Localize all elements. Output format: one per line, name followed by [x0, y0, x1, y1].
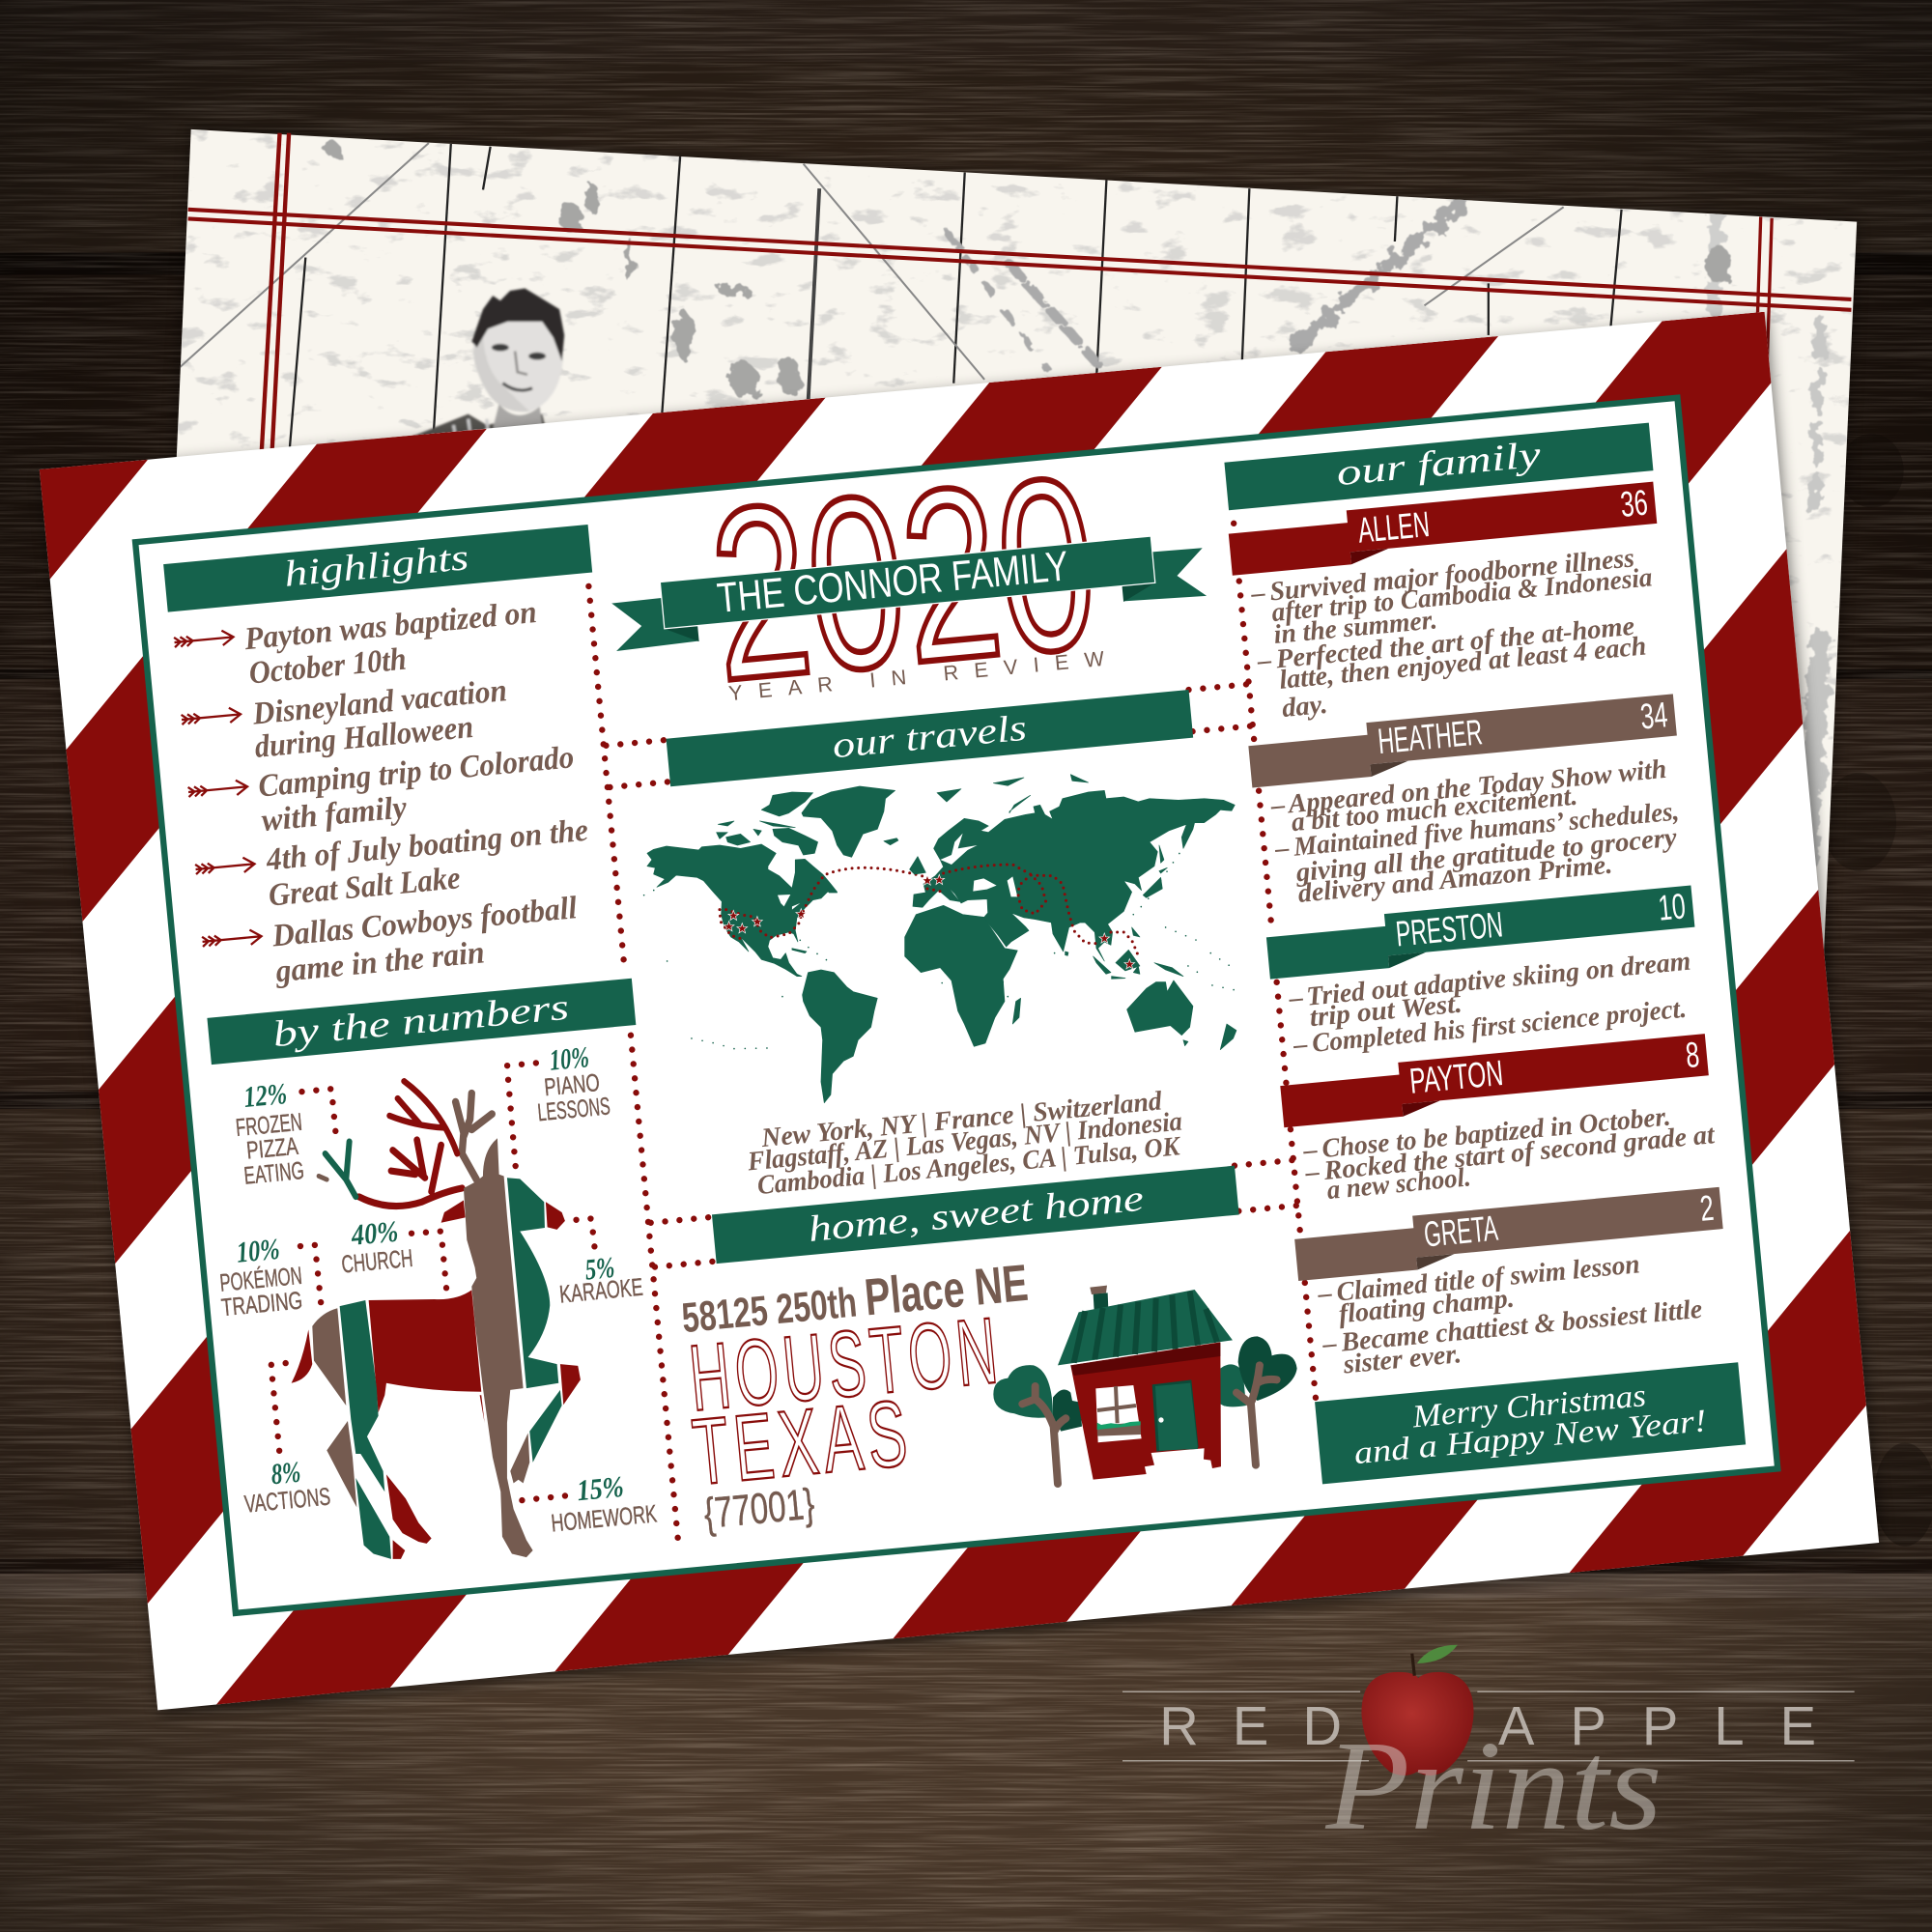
card content, rotated with the card: [132, 369, 1777, 1613]
plaid lines: [188, 133, 1851, 458]
Greta notes: –: [1316, 1278, 1333, 1309]
stat: vacations: 8%: [270, 1456, 302, 1491]
travel destinations list: [744, 1085, 1186, 1202]
Preston notes: –: [1292, 1029, 1309, 1061]
highlights list: Dallas Cowboys football: [270, 890, 579, 954]
member banner: Allen: 36: [1619, 483, 1649, 525]
ribbon: the Connor family: [609, 530, 1208, 652]
travel destinations list: New York, NY | France | Switzerland: [759, 1086, 1164, 1153]
Heather notes: –: [1273, 833, 1291, 865]
home address: {77001}: [702, 1481, 816, 1538]
logo watermark: Red Apple Prints: APPLE: [1498, 1695, 1816, 1756]
Heather notes: Maintained five humans’ schedules,: [1292, 796, 1681, 863]
Payton notes: Chose to be baptized in October.: [1321, 1101, 1672, 1164]
stat: church: [340, 1215, 414, 1279]
greeting box: and a Happy New Year!: [1352, 1403, 1708, 1471]
callout dots for reindeer stats: [271, 1063, 595, 1500]
stat: pokemon trading: [218, 1233, 303, 1321]
heading: our travels: [667, 690, 1193, 786]
Heather notes: Appeared on the Today Show with: [1285, 754, 1667, 820]
Payton notes: –: [1303, 1157, 1321, 1188]
inner white frame: [135, 398, 1777, 1613]
Allen notes: day.: [1281, 690, 1329, 724]
member banner: Heather: [1247, 694, 1678, 787]
stat: karaoke: [558, 1251, 644, 1309]
member banner: Greta: 2: [1698, 1188, 1716, 1229]
main card with candy stripes: [31, 305, 1897, 1725]
map: Europe, Africa, Asia and Oceania: [905, 775, 1243, 1050]
arrow 1: [174, 630, 234, 650]
heading: our travels: our travels: [831, 708, 1029, 766]
heading: our family: our family: [1335, 435, 1543, 494]
stat: homework: 15%: [576, 1470, 625, 1507]
arrow 2: [181, 707, 242, 727]
stat: frozen pizza eating: 12%: [242, 1077, 288, 1114]
Allen notes: –: [1256, 645, 1273, 676]
member banner: Preston: [1265, 885, 1696, 980]
stat: pokemon trading: TRADING: [220, 1287, 303, 1321]
Heather notes: a bit too much excitement.: [1291, 781, 1578, 838]
stat: homework: HOMEWORK: [550, 1500, 658, 1537]
highlights list: during Halloween: [253, 709, 475, 765]
ribbon: the Connor family: THE CONNOR FAMILY: [715, 543, 1070, 622]
stat: pokemon trading: POKÉMON: [218, 1262, 303, 1297]
travel destinations list: Cambodia | Los Angeles, CA | Tulsa, OK: [756, 1131, 1183, 1201]
member banner: Greta: GRETA: [1422, 1208, 1500, 1255]
Heather notes: [1269, 753, 1685, 911]
highlights list: 4th of July boating on the: [264, 812, 589, 878]
Payton notes: –: [1301, 1135, 1319, 1166]
back card shadow: [173, 129, 1857, 985]
home address: 58125 250th Place NE: [679, 1255, 1031, 1344]
member banner: Payton: 8: [1684, 1035, 1701, 1075]
highlights list: game in the rain: [273, 934, 486, 989]
panel: highlights: [163, 525, 628, 996]
arrow 3: [187, 780, 248, 800]
highlights list: with family: [260, 789, 409, 838]
Greta notes: sister ever.: [1341, 1339, 1463, 1380]
highlights list: Great Salt Lake: [267, 860, 462, 914]
world map with travel routes: [644, 775, 1243, 1103]
stat: frozen pizza eating: EATING: [242, 1157, 305, 1190]
stat: karaoke: 5%: [583, 1251, 616, 1287]
Heather notes: –: [1269, 790, 1287, 821]
subtitle: year in review: YEAR IN REVIEW: [727, 646, 1106, 705]
Greta notes: –: [1321, 1328, 1338, 1359]
heading: by the numbers: [207, 979, 636, 1065]
Greta notes: floating champ.: [1337, 1284, 1516, 1329]
heading: home, sweet home: home, sweet home: [807, 1179, 1146, 1250]
Allen notes: latte, then enjoyed at least 4 each: [1278, 631, 1648, 696]
stat: church: CHURCH: [340, 1245, 414, 1279]
back card: barn wood photo: [176, 129, 1857, 952]
home address: TEXAS: [689, 1379, 917, 1505]
stat: homework: [550, 1470, 658, 1537]
stat: frozen pizza eating: FROZEN: [235, 1109, 303, 1142]
Allen notes: [1249, 542, 1662, 725]
logo watermark: Red Apple Prints: [1122, 1645, 1855, 1857]
highlights list: Disneyland vacation: [250, 672, 508, 732]
stat: church: 40%: [349, 1215, 400, 1252]
stat: pokemon trading: 10%: [235, 1233, 281, 1269]
Greta notes: [1316, 1244, 1706, 1381]
stat: frozen pizza eating: PIZZA: [245, 1133, 299, 1165]
greeting box: [1315, 1362, 1746, 1484]
icon: house with trees: [993, 1286, 1297, 1484]
Allen notes: after trip to Cambodia & Indonesia: [1270, 562, 1654, 628]
heading: by the numbers: by the numbers: [271, 987, 571, 1055]
Heather notes: giving all the gratitude to grocery: [1293, 823, 1679, 888]
arrow 5: [202, 929, 262, 950]
stat: piano lessons: LESSONS: [536, 1093, 611, 1126]
Preston notes: [1287, 947, 1696, 1061]
panel: our family: [1222, 422, 1746, 1485]
highlights list: October 10th: [247, 641, 408, 692]
home address: HOUSTON: [685, 1296, 1007, 1431]
highlights list: [242, 591, 600, 989]
greeting box: Merry Christmas: [1410, 1378, 1647, 1435]
heading: our family: [1224, 423, 1653, 510]
Preston notes: Completed his first science project.: [1311, 994, 1688, 1059]
Allen notes: Perfected the art of the at-home: [1274, 611, 1635, 674]
member banner: Payton: [1279, 1034, 1710, 1127]
member banner: Allen: ALLEN: [1356, 504, 1432, 551]
Allen notes: –: [1249, 578, 1266, 609]
Preston notes: trip out West.: [1308, 989, 1463, 1033]
heading: highlights: [163, 525, 592, 612]
stat: frozen pizza eating: [235, 1077, 305, 1190]
reindeer pie graphic: [292, 1081, 581, 1559]
map: Americas and Greenland: [644, 786, 940, 1103]
member banner: Greta: [1293, 1187, 1724, 1281]
Greta notes: Claimed title of swim lesson: [1335, 1249, 1641, 1308]
member banner: Heather: 34: [1638, 695, 1669, 737]
stat: piano lessons: 10%: [548, 1040, 590, 1077]
stat: piano lessons: PIANO: [543, 1069, 601, 1101]
title: 2020 numerals: 2020: [700, 424, 1106, 732]
Payton notes: Rocked the start of second grade at: [1321, 1120, 1717, 1186]
main card shadow: [42, 317, 1882, 1716]
member banner: Payton: PAYTON: [1407, 1053, 1505, 1101]
logo watermark: Red Apple Prints: RED: [1159, 1695, 1342, 1756]
dotted connectors: [588, 524, 1323, 1546]
travel destinations list: Flagstaff, AZ | Las Vegas, NV | Indonesia: [746, 1107, 1183, 1178]
home address: [678, 1255, 1048, 1539]
member banner: Preston: PRESTON: [1394, 904, 1505, 953]
Preston notes: Tried out adaptive skiing on dream: [1305, 947, 1692, 1012]
Allen notes: in the summer.: [1272, 605, 1438, 650]
Preston notes: –: [1287, 982, 1304, 1013]
arrow 4: [195, 857, 255, 877]
stat: vacations: VACTIONS: [243, 1483, 331, 1519]
highlights list: Camping trip to Colorado: [257, 739, 576, 805]
member banner: Heather: HEATHER: [1377, 712, 1484, 761]
Heather notes: delivery and Amazon Prime.: [1296, 850, 1613, 909]
stat: karaoke: KARAOKE: [558, 1274, 644, 1309]
photo: man's portrait: [407, 288, 564, 456]
heading: home, sweet home: [712, 1166, 1239, 1264]
logo watermark: Red Apple Prints: Prints: [1324, 1715, 1662, 1857]
stat: vacations: [243, 1456, 331, 1519]
member banner: Allen: [1228, 482, 1658, 576]
Allen notes: Survived major foodborne illness: [1268, 543, 1635, 608]
Greta notes: Became chattiest & bossiest little: [1339, 1294, 1703, 1358]
Payton notes: a new school.: [1325, 1162, 1472, 1206]
Payton notes: [1301, 1097, 1719, 1208]
heading: highlights: highlights: [282, 537, 470, 595]
member banner: Preston: 10: [1657, 886, 1688, 928]
highlights list: Payton was baptized on: [242, 594, 538, 657]
stat: piano lessons: [536, 1040, 611, 1126]
